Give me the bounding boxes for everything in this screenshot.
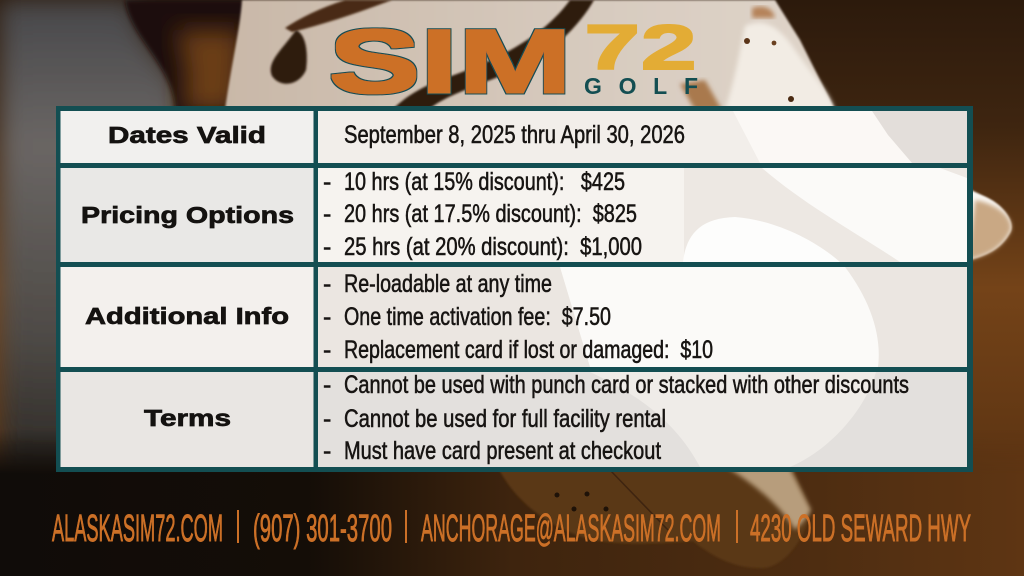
- list: pricing: [323, 168, 642, 261]
- footer contact line: [52, 508, 971, 550]
- list: terms: [323, 371, 909, 465]
- row: dates valid: [60, 111, 967, 163]
- list: terms: -: [323, 437, 331, 465]
- table frame with rows: [56, 106, 973, 472]
- footer contact line: ALASKASIM72.COM: [52, 508, 223, 550]
- list: pricing: 20 hrs (at 17.5% discount): $825: [344, 200, 637, 228]
- list: pricing: -: [323, 233, 331, 261]
- footer contact line: (907) 301-3700: [253, 508, 392, 550]
- list: additional info: Replacement card if lost or damaged: $10: [344, 336, 713, 364]
- list: additional info: Re-loadable at any time: [344, 270, 552, 298]
- text: dates: September 8, 2025 thru April 30, 2026: [344, 121, 685, 149]
- row: pricing options: [60, 168, 967, 262]
- heading: pricing options: Pricing Options: [81, 202, 294, 228]
- row: terms: [60, 371, 967, 467]
- list: additional info: -: [323, 336, 331, 364]
- list: terms: Must have card present at checkout: [344, 437, 661, 465]
- row: additional info: [60, 267, 967, 367]
- logo wordmark: SIM: SIM: [329, 11, 572, 111]
- list: pricing: 10 hrs (at 15% discount): $425: [344, 168, 625, 196]
- heading: additional info: Additional Info: [85, 303, 289, 329]
- logo number: 72: 72: [584, 13, 697, 83]
- list: pricing: 25 hrs (at 20% discount): $1,000: [344, 233, 642, 261]
- logo: SIM72 Golf: [329, 11, 698, 111]
- list: additional info: One time activation fee: $7.50: [344, 303, 611, 331]
- heading: dates valid: Dates Valid: [108, 122, 266, 148]
- list: terms: -: [323, 405, 331, 433]
- list: pricing: -: [323, 168, 331, 196]
- logo word: GOLF: GOLF: [584, 73, 698, 99]
- list: additional info: -: [323, 270, 331, 298]
- lower glove: [498, 468, 811, 568]
- list: additional info: [323, 270, 713, 364]
- list: pricing: -: [323, 200, 331, 228]
- list: terms: -: [323, 371, 331, 399]
- icon: eyelet hole: [271, 30, 307, 84]
- heading: terms: Terms: [144, 405, 231, 431]
- list: additional info: -: [323, 303, 331, 331]
- list: terms: Cannot be used for full facility rental: [344, 405, 666, 433]
